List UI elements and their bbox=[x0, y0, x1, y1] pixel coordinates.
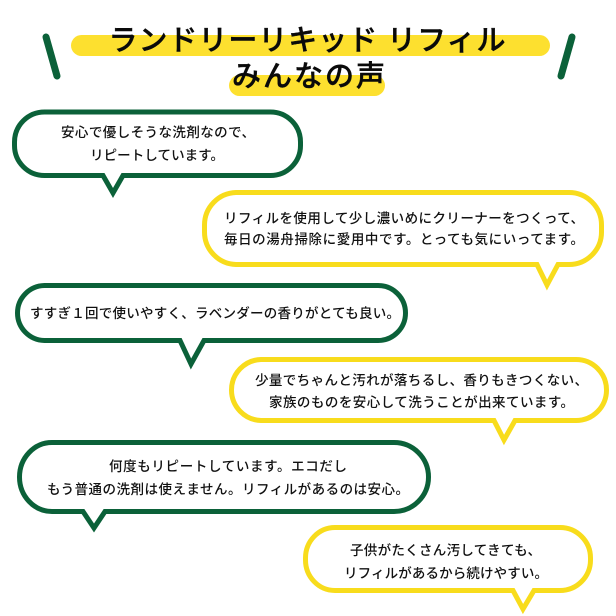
bubble text: リフィルがあるから続けやすい。 bbox=[344, 565, 548, 581]
title highlight: line 2 bbox=[229, 75, 385, 96]
bubble text: 家族のものを安心して洗うことが出来ています。 bbox=[269, 394, 574, 410]
bubble outline bbox=[17, 286, 405, 364]
bubble outline bbox=[232, 360, 606, 440]
bubble text: 安心で優しそうな洗剤なので、 bbox=[61, 125, 255, 140]
speech bubble 3 bbox=[17, 286, 405, 364]
bubble outline bbox=[14, 112, 300, 193]
bubble text: 少量でちゃんと汚れが落ちるし、香りもきつくない、 bbox=[255, 372, 588, 388]
title line 2: みんなの声 bbox=[232, 60, 385, 93]
left green slash bbox=[46, 37, 57, 76]
bubble text: すすぎ１回で使いやすく、ラベンダーの香りがとても良い。 bbox=[30, 305, 400, 321]
bubble text: リフィルを使用して少し濃いめにクリーナーをつくって、 bbox=[224, 211, 584, 226]
bubble outline bbox=[20, 442, 428, 528]
bubble text: リピートしています。 bbox=[90, 148, 224, 163]
bubble text: 何度もリピートしています。エコだし bbox=[109, 459, 347, 474]
speech bubble 4 bbox=[232, 360, 606, 440]
bubble outline bbox=[204, 192, 602, 285]
title highlight: line 1 bbox=[71, 35, 550, 56]
bubble text: もう普通の洗剤は使えません。リフィルがあるのは安心。 bbox=[47, 481, 409, 497]
bubble outline bbox=[306, 528, 590, 609]
right green slash bbox=[561, 37, 572, 76]
speech bubble 6 bbox=[306, 528, 590, 609]
title line 1: ランドリーリキッド リフィル bbox=[108, 25, 506, 57]
speech bubble 5 bbox=[20, 442, 428, 528]
bubble text: 毎日の湯舟掃除に愛用中です。とっても気にいってます。 bbox=[224, 231, 584, 247]
speech bubble 2 bbox=[204, 192, 602, 285]
bubble text: 子供がたくさん汚してきても、 bbox=[350, 542, 541, 558]
speech bubble 1 bbox=[14, 112, 300, 193]
title bbox=[46, 25, 572, 96]
